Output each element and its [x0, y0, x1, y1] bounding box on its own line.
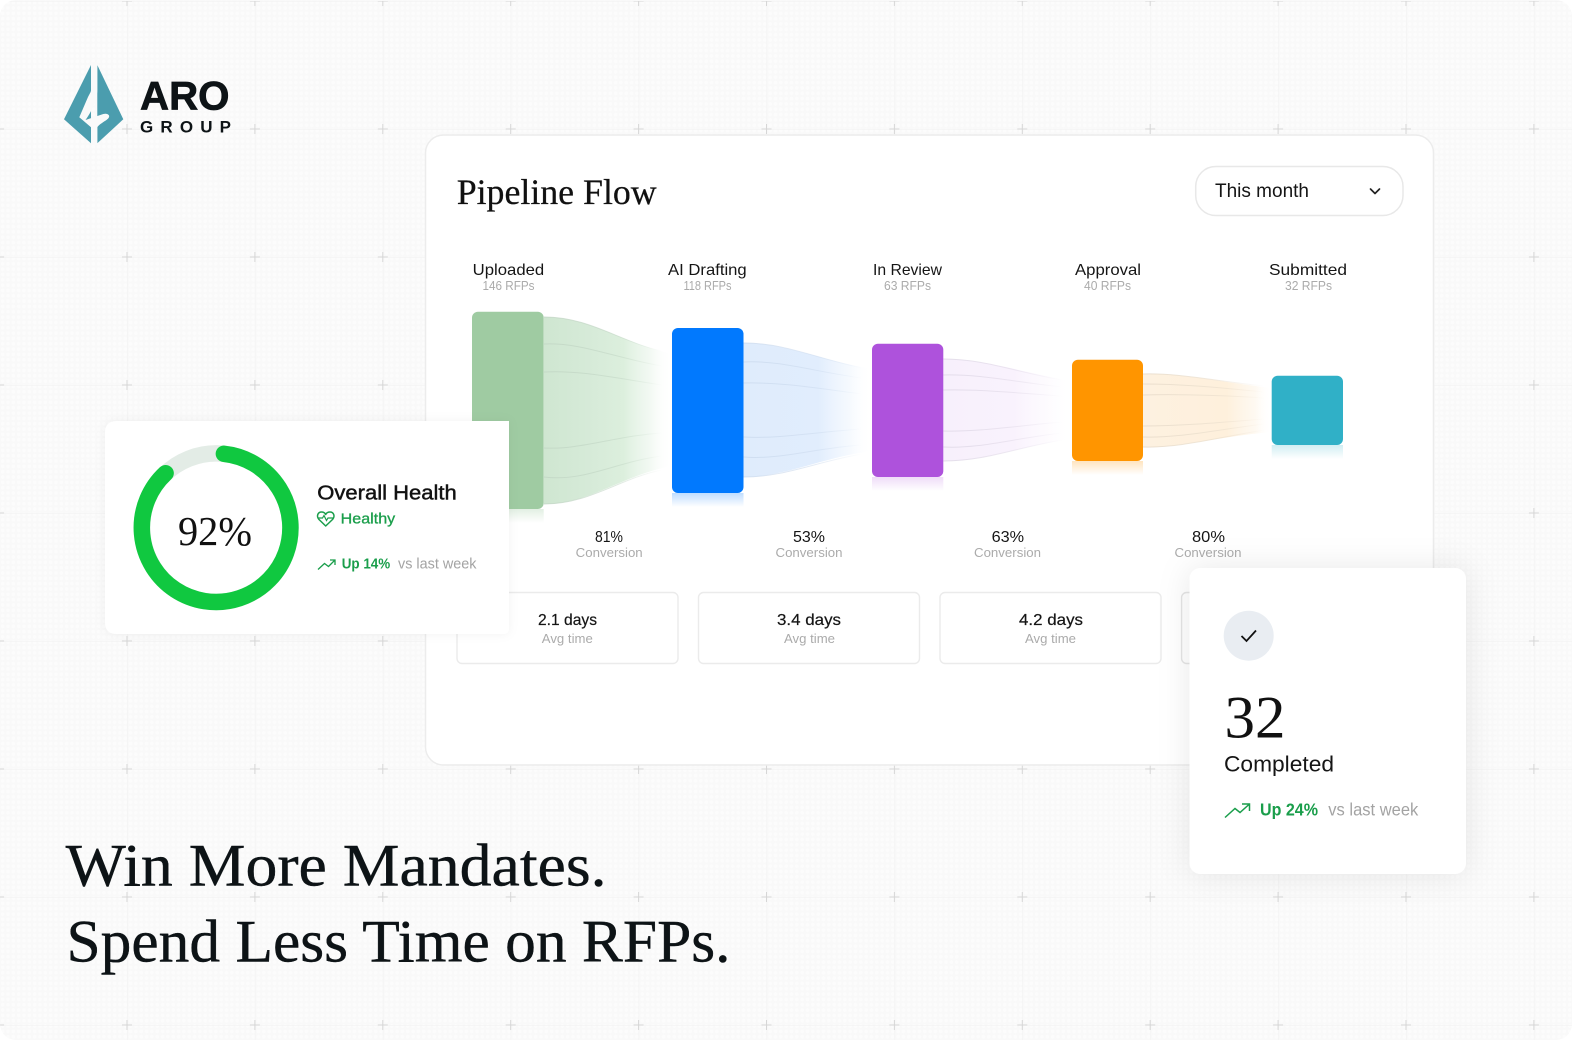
stage: approval: Approval	[1075, 262, 1141, 279]
trend: up 24%: Up 24%	[1260, 800, 1318, 820]
time card: 3.4 days: 3.4 days	[777, 612, 841, 629]
donut chart: 92%: 92%	[178, 508, 252, 554]
stage: submitted: Submitted	[1269, 262, 1347, 279]
stage: submitted: 32 RFPs	[1285, 279, 1332, 293]
panel background	[426, 135, 1434, 765]
conversion: 81%: Conversion	[576, 546, 643, 560]
time card: 2.1 days: Avg time	[542, 632, 593, 646]
conversion: 80%: Conversion	[1174, 546, 1242, 560]
logo: ARO Group	[64, 62, 231, 145]
stage: in review	[873, 262, 942, 293]
time card: 3.4 days	[698, 592, 920, 664]
health status: healthy	[318, 510, 396, 528]
logo wordmark ARO: ARO	[140, 74, 230, 118]
flow: uploaded to AI drafting	[544, 317, 672, 504]
health title: Overall Health	[317, 482, 457, 504]
stage: submitted	[1269, 262, 1347, 293]
stage labels	[473, 262, 1347, 293]
time card: 4.2 days: Avg time	[1025, 632, 1076, 646]
panel: pipeline flow	[426, 135, 1434, 765]
trend: up 24%	[1225, 800, 1419, 820]
stage: uploaded: Uploaded	[473, 262, 544, 279]
bar: AI drafting	[672, 328, 744, 507]
trend: up 14%: vs last week	[398, 556, 477, 572]
conversion: 53%: Conversion	[776, 546, 843, 560]
time card: 4.2 days: 4.2 days	[1019, 612, 1083, 629]
time card: 2.1 days	[457, 592, 678, 664]
average time cards	[457, 592, 1403, 664]
icon: check mark	[1224, 611, 1274, 661]
sankey flows	[544, 317, 1272, 504]
conversion: 80%	[1174, 529, 1242, 560]
conversion: 63%	[974, 529, 1041, 560]
time card: 4.2 days	[940, 592, 1161, 664]
dropdown: this month	[1196, 166, 1403, 216]
flow: approval to submitted	[1143, 374, 1272, 447]
health status: healthy: Healthy	[341, 510, 396, 528]
conversion: 80%: 80%	[1192, 529, 1225, 546]
logo wordmark GROUP: GROUP	[140, 117, 231, 136]
trend: up 14%	[318, 556, 477, 572]
conversion: 53%	[776, 529, 843, 560]
flow: in review to approval	[943, 359, 1072, 461]
conversion rates	[576, 529, 1242, 560]
headline: Spend Less Time on RFPs.	[66, 909, 730, 975]
conversion: 81%	[576, 529, 643, 560]
stage: approval	[1075, 262, 1141, 293]
stage: in review: 63 RFPs	[884, 279, 931, 293]
bar: in review	[872, 344, 943, 491]
bar: submitted	[1272, 376, 1343, 459]
stage: AI drafting: AI Drafting	[668, 262, 747, 279]
conversion: 63%: Conversion	[974, 546, 1041, 560]
completed label: Completed	[1224, 752, 1334, 776]
time card: partially hidden	[1182, 592, 1403, 664]
card: overall health	[105, 421, 509, 634]
donut chart: 92%	[142, 453, 291, 602]
stage: AI drafting: 118 RFPs	[684, 279, 732, 293]
completed count: 32	[1224, 684, 1286, 750]
card background	[1190, 568, 1466, 874]
headline	[66, 833, 731, 975]
funnel bars	[472, 312, 1343, 523]
conversion: 81%: 81%	[595, 529, 623, 546]
trend: up 24%: vs last week	[1328, 800, 1419, 820]
flow: AI drafting to in review	[744, 343, 872, 477]
time card: 3.4 days: Avg time	[784, 632, 835, 646]
stage: approval: 40 RFPs	[1084, 279, 1131, 293]
stage: uploaded: 146 RFPs	[482, 279, 534, 293]
stage: in review: In Review	[873, 262, 942, 279]
bar: approval	[1072, 360, 1143, 475]
conversion: 53%: 53%	[793, 529, 825, 546]
card background	[105, 421, 509, 634]
headline: Win More Mandates.	[66, 833, 607, 899]
trend: up 14%: Up 14%	[342, 556, 390, 572]
dropdown: this month: This month	[1215, 181, 1309, 202]
card: completed	[1190, 568, 1466, 874]
time card: 2.1 days: 2.1 days	[538, 612, 597, 629]
stage: AI drafting	[668, 262, 747, 293]
panel heading: Pipeline Flow	[457, 172, 657, 212]
icon: ARO arrowhead mark	[64, 62, 123, 145]
stage: uploaded	[473, 262, 544, 293]
conversion: 63%: 63%	[992, 529, 1024, 546]
bar: uploaded	[472, 312, 544, 523]
